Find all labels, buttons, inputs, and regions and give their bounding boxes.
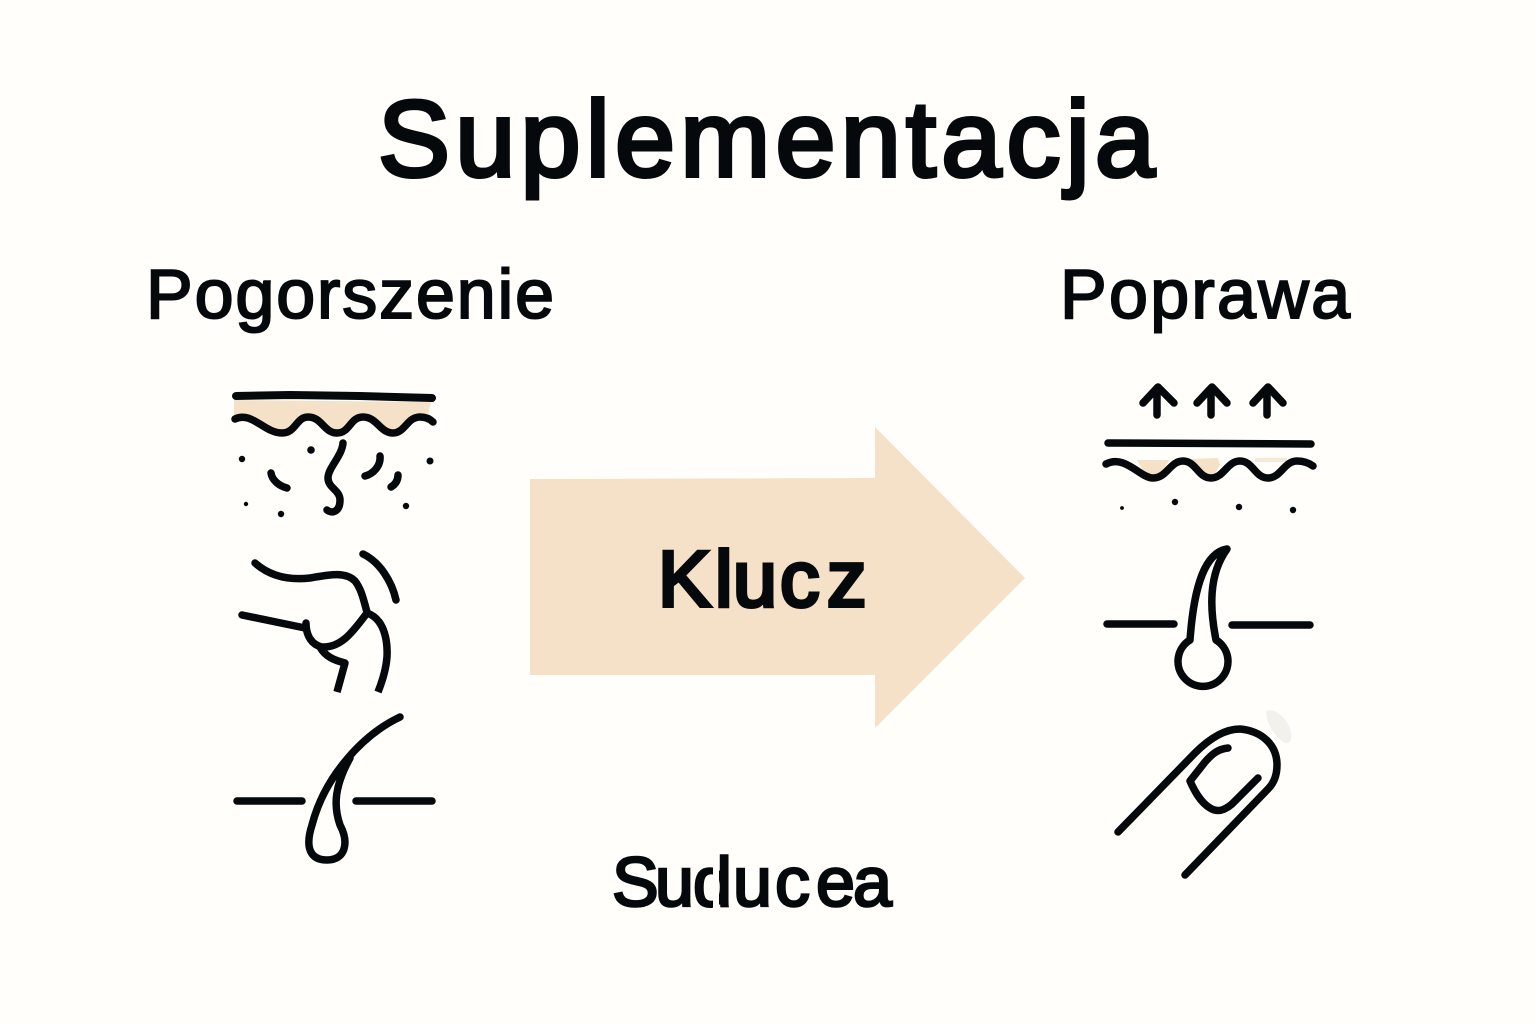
icon: damaged skin	[234, 395, 434, 517]
icon: improved skin	[1106, 387, 1313, 513]
icon: weak hair	[237, 717, 432, 860]
icon: knee joint	[242, 554, 396, 692]
title: Suplementacja	[378, 78, 1156, 199]
icon: healthy nail	[1118, 710, 1291, 875]
heading: Pogorszenie: Pogorszenie	[146, 255, 554, 333]
label: Suducea: Suducea	[612, 843, 892, 921]
heading: Poprawa: Poprawa	[1060, 255, 1350, 333]
arrow: Klucz	[530, 427, 1025, 728]
icon: healthy hair	[1107, 549, 1310, 686]
arrow: Klucz: Klucz	[658, 534, 866, 623]
